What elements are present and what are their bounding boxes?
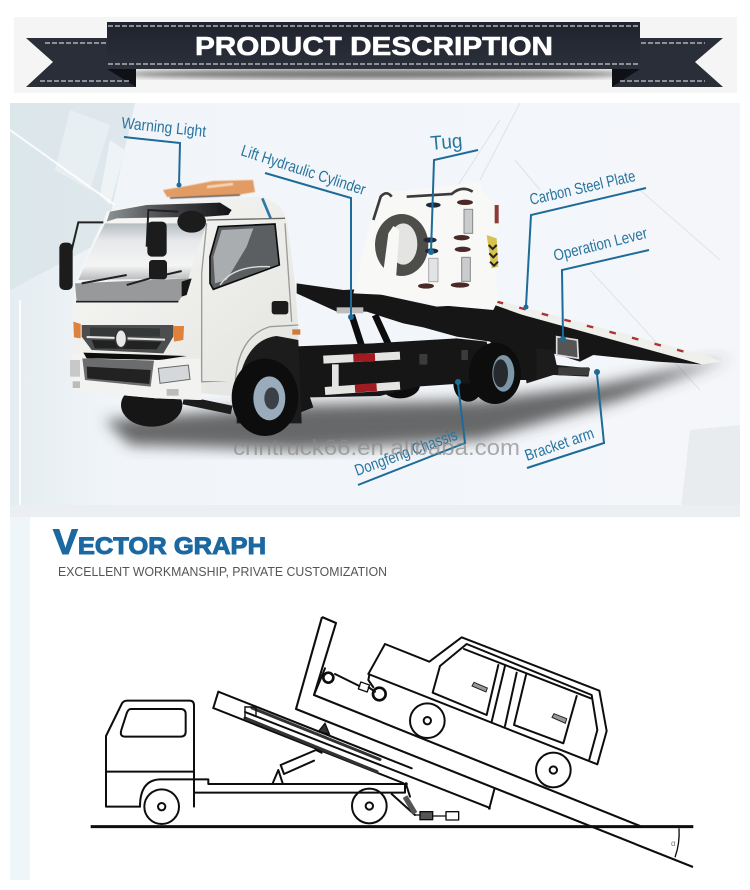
car body (368, 637, 607, 764)
vector graph heading: VECTOR GRAPH (53, 523, 266, 562)
vector drawing: tilted bed (213, 692, 488, 807)
door seams (202, 223, 298, 387)
hidden dual wheel (380, 372, 420, 398)
dongfeng badge (115, 330, 127, 348)
left mirror (59, 222, 103, 290)
cab window (121, 709, 186, 737)
grille (82, 325, 173, 353)
truck: chassis and rear wheel (290, 283, 537, 417)
label: operation lever: Operation Lever (552, 225, 650, 265)
winch and hook (314, 668, 386, 700)
centre mirrors (147, 210, 206, 279)
banner: product description (14, 17, 737, 93)
label: lift hydraulic cylinder (239, 143, 368, 320)
front wheel (232, 359, 298, 436)
truck ground shadow (105, 358, 730, 450)
operation box (557, 337, 578, 358)
bumper (83, 353, 187, 360)
vector drawing: ramp and winch (296, 617, 693, 867)
label: bracket arm: Bracket arm (523, 425, 596, 465)
label: carbon steel plate (524, 168, 646, 310)
door handles (472, 682, 567, 723)
subtitle: EXCELLENT WORKMANSHIP, PRIVATE CUSTOMIZATION (58, 565, 387, 579)
label: dongfeng chassis: Dongfeng Chassis (353, 427, 460, 480)
rear jack (405, 797, 459, 820)
label: operation lever (552, 225, 650, 342)
truck: flatbed underside (487, 298, 722, 383)
banner title: PRODUCT DESCRIPTION (195, 33, 553, 61)
dash strip (75, 278, 190, 302)
bed tail support (489, 789, 494, 808)
chassis frame (290, 338, 497, 417)
vector drawing: car on ramp (91, 637, 693, 857)
label: tug (428, 130, 478, 255)
car wheels (410, 703, 571, 787)
wheel arch (237, 336, 302, 423)
label: carbon steel plate: Carbon Steel Plate (528, 168, 637, 209)
label: lift hydraulic cylinder: Lift Hydraulic Cylinder (239, 143, 368, 199)
panel: vector graph (10, 517, 734, 880)
sun visor (107, 203, 232, 222)
side stripes (323, 356, 400, 391)
chevron panel (487, 235, 498, 268)
vector drawing: tow truck (106, 701, 415, 824)
angle arc: α (671, 839, 676, 848)
bed band (297, 283, 537, 380)
watermark: cnntruck66.en.alibaba.com (233, 435, 520, 460)
angle arc (671, 828, 679, 857)
far front wheel (121, 383, 182, 427)
hydraulic cylinder (273, 750, 322, 783)
truck: headboard (353, 182, 499, 310)
hook arcs (373, 189, 473, 220)
cab body (70, 197, 298, 400)
truck wheels (144, 789, 387, 824)
car windows and pillars (433, 665, 577, 743)
label: dongfeng chassis (353, 379, 465, 485)
flatbed white side rail (487, 298, 722, 364)
chassis (140, 779, 405, 807)
windshield (78, 223, 207, 280)
label: tug: Tug (430, 130, 463, 155)
rear wheel (469, 343, 521, 404)
truck: cab (59, 197, 302, 436)
ground line (91, 822, 693, 831)
fittings (418, 200, 473, 289)
door window (210, 224, 279, 289)
label: warning light: Warning Light (121, 115, 207, 141)
blue stripe (262, 198, 271, 218)
label: warning light (121, 115, 207, 188)
warning light (163, 180, 255, 198)
hydraulic struts (352, 315, 388, 346)
slots (464, 209, 473, 233)
panel: truck photo (10, 103, 740, 517)
label: bracket arm (523, 369, 604, 468)
spare wheel (375, 214, 428, 294)
truck cab outline (106, 701, 194, 807)
